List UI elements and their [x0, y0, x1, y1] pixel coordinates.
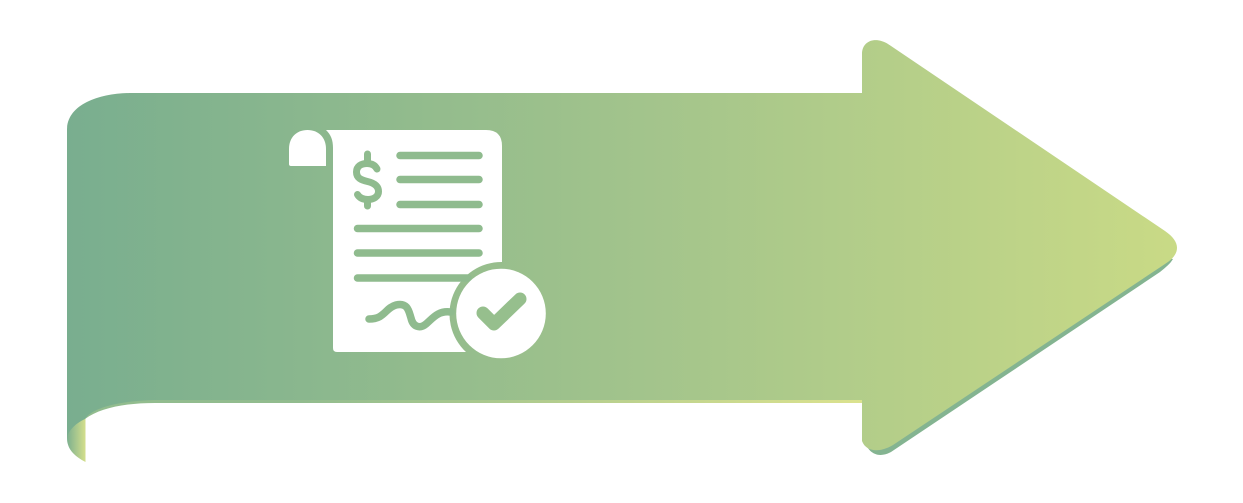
- signature squiggle: [369, 304, 451, 327]
- icon: dollar sign: [356, 154, 378, 206]
- icon: document page: [326, 130, 502, 352]
- icon: check mark: [483, 299, 520, 324]
- arrow body: [67, 40, 1177, 450]
- under edge of bar: [85, 398, 863, 419]
- arrow shadow edge: [864, 255, 1173, 455]
- icon: rolled paper corner: [289, 130, 326, 166]
- icon: invoice with check mark: [289, 130, 546, 358]
- ribbon fold: [67, 400, 86, 462]
- check badge: [456, 269, 546, 358]
- text lines on document: [358, 156, 479, 278]
